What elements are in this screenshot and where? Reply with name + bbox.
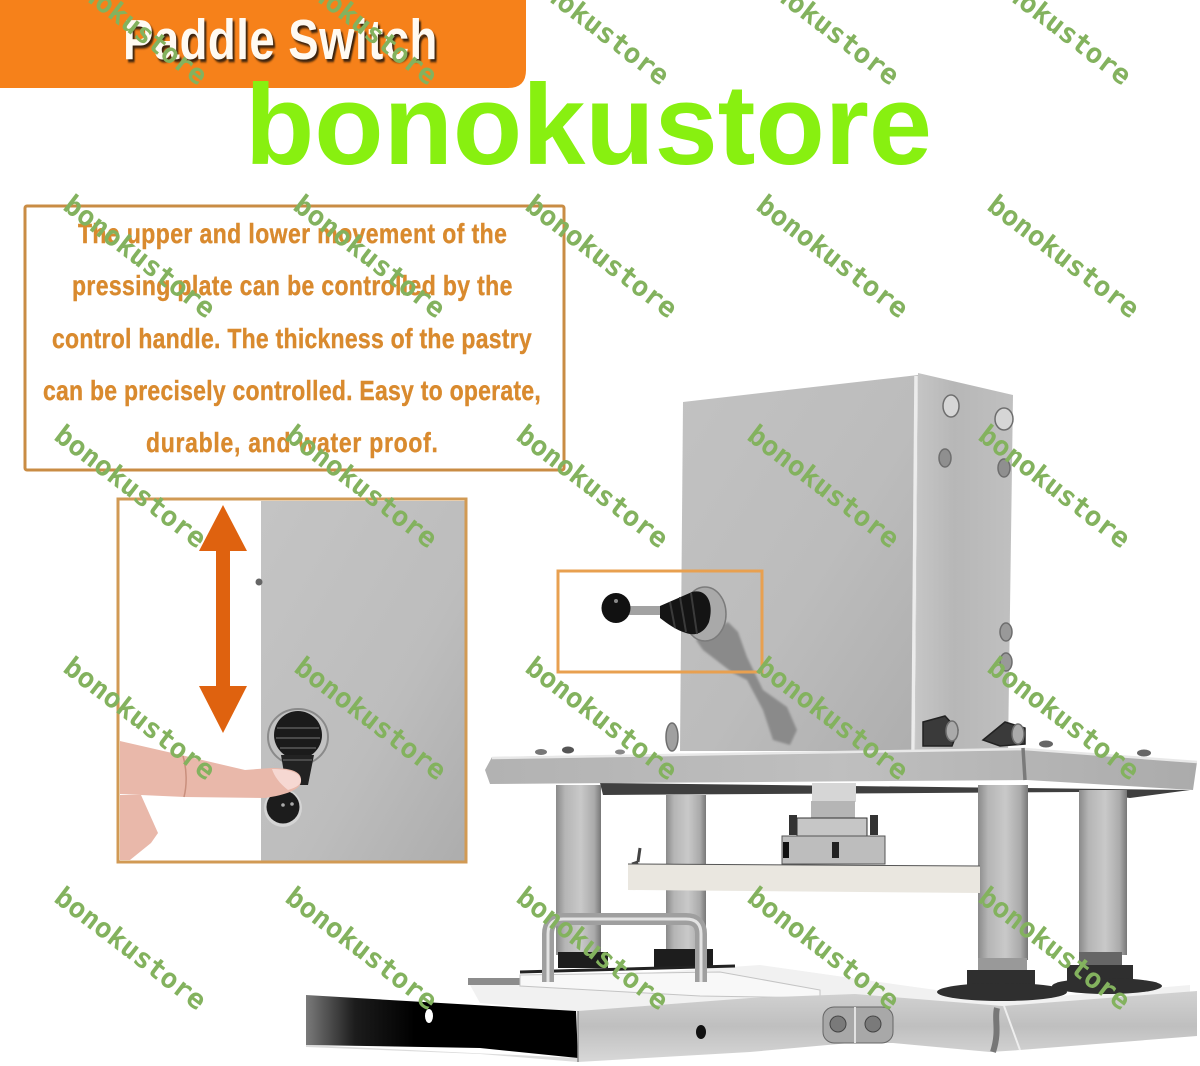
corner bracket with bolts bbox=[823, 1007, 893, 1043]
inset: finger operating switch bbox=[118, 499, 466, 862]
watermark pattern: bonokustore bbox=[287, 189, 451, 325]
carrying handle and mounts bbox=[468, 919, 820, 998]
icon: up and down arrow bbox=[199, 505, 247, 733]
watermark pattern: bonokustore bbox=[510, 419, 674, 555]
watermark pattern: bonokustore bbox=[48, 419, 212, 555]
watermark pattern: bonokustore bbox=[972, 419, 1136, 555]
watermark pattern: bonokustore bbox=[741, 881, 905, 1017]
column foot flanges bbox=[937, 965, 1162, 1001]
title banner: Paddle Switch bbox=[123, 7, 437, 71]
control box bbox=[680, 373, 1013, 751]
pastry press machine bbox=[306, 373, 1197, 1062]
box screws bbox=[666, 395, 1025, 751]
description text box: durable, and water proof. bbox=[146, 428, 438, 459]
watermark pattern: bonokustore bbox=[981, 189, 1145, 325]
watermark pattern: bonokustore bbox=[972, 881, 1136, 1017]
underside shadow bbox=[600, 783, 1190, 798]
white pressing plate bbox=[628, 864, 980, 893]
description text box: can be precisely controlled. Easy to operate, bbox=[43, 376, 541, 407]
description text box: pressing plate can be controlled by the bbox=[72, 271, 512, 302]
watermark pattern: bonokustore bbox=[48, 881, 212, 1017]
description text box: control handle. The thickness of the pastry bbox=[52, 324, 532, 355]
title banner: Paddle Switch bbox=[125, 10, 439, 74]
watermark pattern: bonokustore bbox=[519, 651, 683, 787]
watermark pattern: bonokustore bbox=[279, 419, 443, 555]
watermark pattern: bonokustore bbox=[57, 651, 221, 787]
watermark pattern: bonokustore bbox=[741, 419, 905, 555]
upper plate bbox=[485, 740, 1197, 790]
watermark pattern: bonokustore bbox=[279, 881, 443, 1017]
watermark pattern: bonokustore bbox=[981, 651, 1145, 787]
watermark pattern: bonokustore bbox=[510, 881, 674, 1017]
base plate surface bbox=[470, 965, 1190, 1012]
watermark pattern: bonokustore bbox=[750, 651, 914, 787]
support columns bbox=[556, 785, 1127, 971]
hand and pointing finger bbox=[120, 741, 301, 860]
watermark pattern: bonokustore bbox=[750, 189, 914, 325]
joystick handle bbox=[602, 587, 726, 641]
watermark pattern: bonokustore bbox=[519, 189, 683, 325]
inset box side panel bbox=[261, 501, 465, 861]
store name heading: bonokustore bbox=[245, 62, 932, 189]
central ram and clamp bbox=[632, 783, 885, 864]
description text box bbox=[25, 206, 564, 470]
callout frame around handle bbox=[558, 571, 762, 672]
title banner bbox=[0, 0, 526, 88]
joystick boot close-up bbox=[264, 709, 328, 827]
watermark pattern: bonokustore bbox=[288, 651, 452, 787]
watermark pattern: bonokustore bbox=[57, 189, 221, 325]
description text box: The upper and lower movement of the bbox=[78, 219, 507, 250]
base tray bbox=[306, 991, 1197, 1062]
